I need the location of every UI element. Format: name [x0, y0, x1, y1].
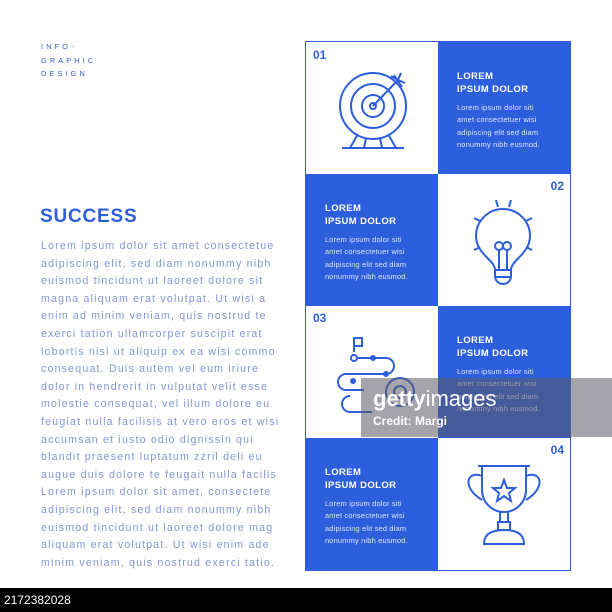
cell text 3: Lorem ipsum dolor siti: [457, 367, 534, 376]
grid panel: [305, 41, 571, 571]
body text: blandit praesent luptatum zzril deli eu: [41, 451, 263, 463]
body text: adipiscing elit, sed diam nonummy nibh: [41, 504, 272, 516]
cell text 2: adipiscing elit sed diam: [325, 260, 406, 269]
body text: aliquam erat volutpat. Ut wisi enim ade: [41, 539, 270, 551]
cell 03 icon: path: 03: [313, 311, 326, 325]
cell text 4: Lorem ipsum dolor siti: [325, 499, 402, 508]
header label: GRAPHIC: [41, 56, 96, 64]
title: SUCCESS: [40, 206, 137, 227]
body text: magna aliquam erat volutpat. Ut wisi a: [41, 293, 266, 305]
cell text 1: Lorem ipsum dolor siti: [457, 103, 534, 112]
cell 04 icon: trophy: 04: [551, 443, 564, 457]
cell text 4: adipiscing elit sed diam: [325, 524, 406, 533]
cell text 2: amet consectetuer wisi: [325, 247, 405, 256]
body text: adipiscing elit, sed diam nonummy nibh: [41, 258, 272, 270]
header label: INFO-: [41, 42, 76, 51]
body text: dolor in hendrerit in vulputat velit esse: [41, 381, 268, 393]
cell text 2: IPSUM DOLOR: [325, 216, 396, 227]
cell text 2: nonummy nibh eusmod.: [325, 272, 408, 281]
body text: augue duis dolore te feugait nulla facilis: [41, 469, 277, 481]
cell text 4: IPSUM DOLOR: [325, 480, 396, 491]
cell text 4: nonummy nibh eusmod.: [325, 536, 408, 545]
footer id bar: 2172382028: [4, 593, 71, 607]
body text: exerci tation ullamcorper suscipit erat: [41, 328, 263, 340]
cell text 1: adipiscing elit sed diam: [457, 128, 538, 137]
watermark: Credit: Margi: [373, 414, 447, 428]
cell text 2: [306, 174, 438, 306]
cell text 3: amet consectetuer wisi: [457, 379, 537, 388]
cell text 1: nonummy nibh eusmod.: [457, 140, 540, 149]
cell text 3: LOREM: [457, 335, 493, 346]
cell text 4: amet consectetuer wisi: [325, 511, 405, 520]
footer id bar: [0, 588, 612, 612]
body text: euismod tincidunt ut laoreet dolore mag: [41, 522, 273, 534]
body text: [41, 240, 279, 569]
cell text 3: adipiscing elit sed diam: [457, 392, 538, 401]
body text: minim veniam, quis nostrud exerci tatio.: [41, 557, 275, 569]
cell 02 icon: lightbulb: 02: [551, 179, 564, 193]
cell 01 icon: target: [313, 48, 407, 149]
body text: euismod tincidunt ut laoreet dolore sit: [41, 275, 263, 287]
body text: consequat. Duis autem vel eum iriure: [41, 363, 259, 375]
cell text 1: IPSUM DOLOR: [457, 84, 528, 95]
cell text 1: [438, 42, 570, 174]
body text: enim ad minim veniam, quis nostrud te: [41, 310, 267, 322]
cell text 4: [306, 438, 438, 570]
header label: [41, 42, 96, 78]
header label: DESIGN: [41, 69, 88, 78]
cell 04 icon: trophy: [467, 443, 564, 545]
cell text 2: Lorem ipsum dolor siti: [325, 235, 402, 244]
cell text 1: LOREM: [457, 71, 493, 82]
cell text 1: amet consectetuer wisi: [457, 115, 537, 124]
cell 02 icon: lightbulb: [474, 179, 564, 285]
body text: Lorem ipsum dolor sit amet consectetue: [41, 240, 274, 252]
cell text 3: nonummy nibh eusmod.: [457, 404, 540, 413]
cell text 3: [438, 306, 570, 438]
body text: molestie consequat, vel illum dolore eu: [41, 398, 270, 410]
cell text 2: LOREM: [325, 203, 361, 214]
cell text 4: LOREM: [325, 467, 361, 478]
watermark: gettyimages: [373, 386, 496, 411]
cell 01 icon: target: 01: [313, 48, 326, 62]
body text: feugiat nulla facilisis at vero eros et wisi: [41, 416, 279, 428]
body text: lobortis nisl ut aliquip ex ea wisi commo: [41, 346, 276, 358]
cell 03 icon: path: [313, 311, 415, 413]
body text: Lorem ipsum dolor sit amet, consectete: [41, 486, 271, 498]
cell text 3: IPSUM DOLOR: [457, 348, 528, 359]
watermark: [361, 378, 612, 437]
body text: accumsan et iusto odio dignissin qui: [41, 434, 254, 446]
